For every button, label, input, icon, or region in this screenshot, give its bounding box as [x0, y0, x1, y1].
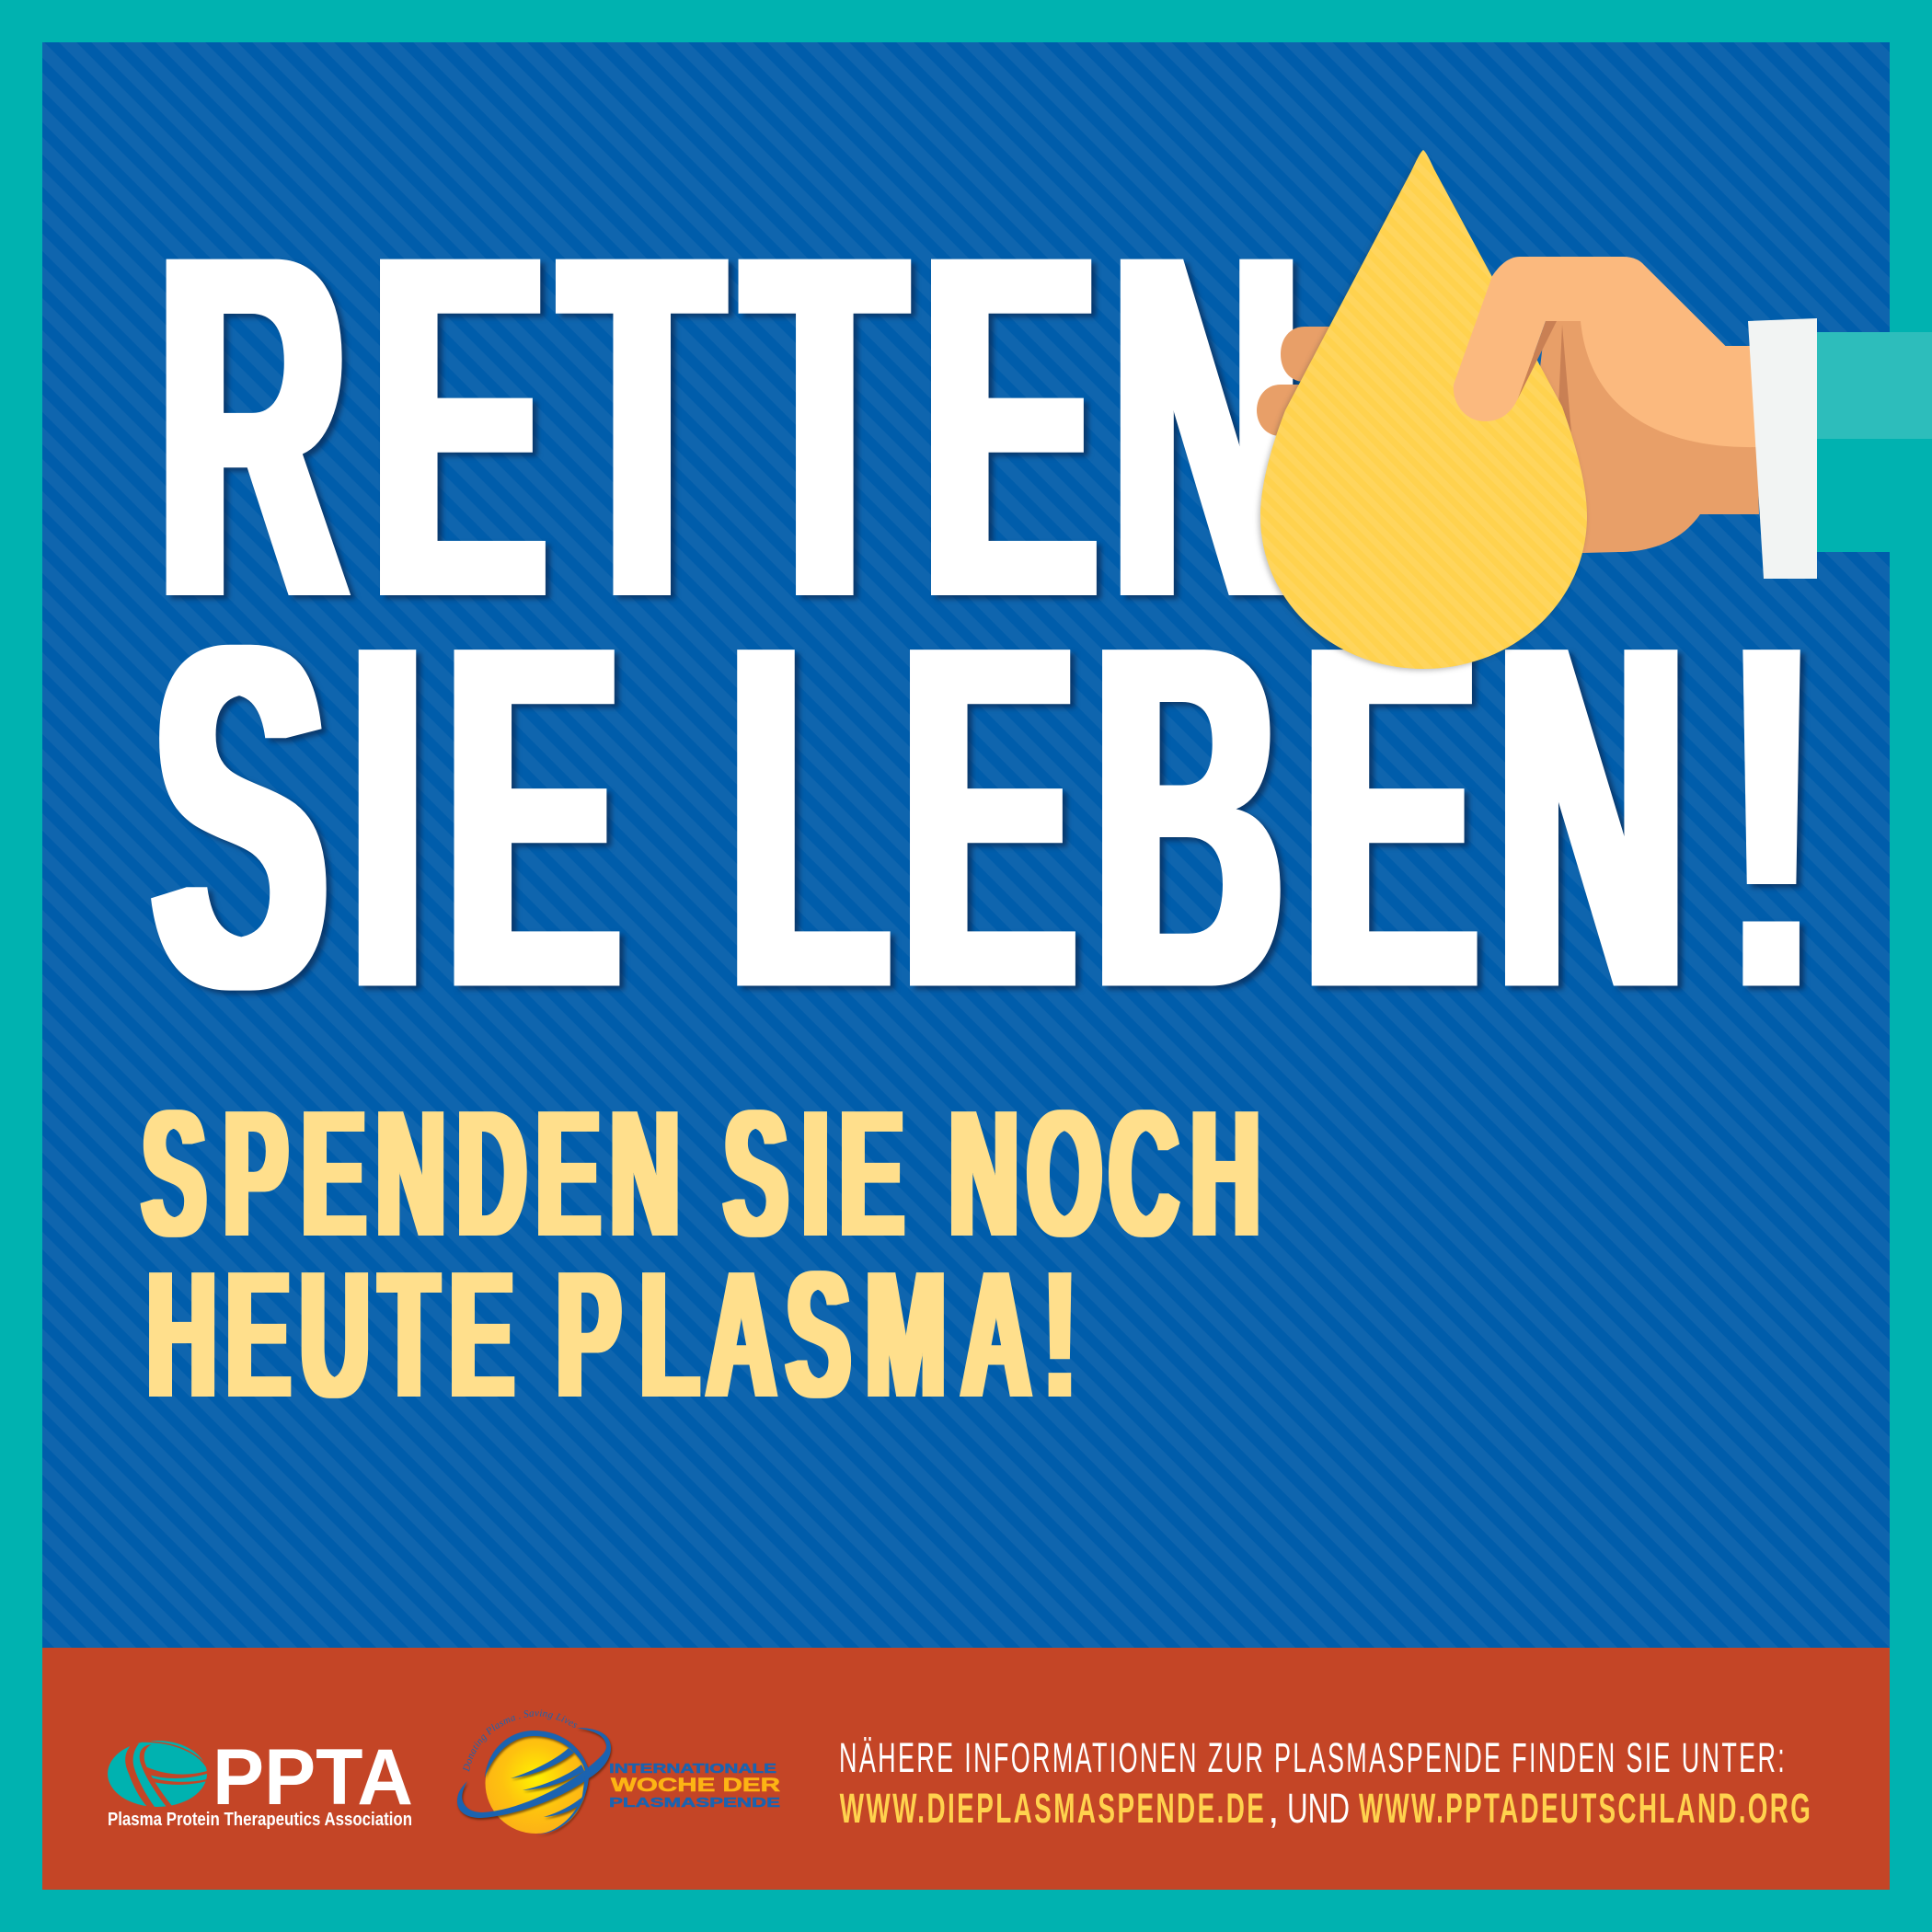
fingers behind the drop — [1257, 327, 1343, 436]
hand palm shadow side — [1518, 321, 1759, 553]
hand upper side and thumb — [1454, 257, 1757, 447]
PPTA globe mark — [108, 1741, 207, 1807]
crease shade — [1558, 325, 1571, 432]
sleeve — [1817, 332, 1932, 552]
logo: PPTA — [108, 1733, 413, 1830]
logo wordmark: INTERNATIONALE — [609, 1762, 776, 1777]
text block: footer information: WWW.PPTADEUTSCHLAND.ORG — [1359, 1785, 1811, 1832]
PPTA wordmark: PPTA — [213, 1733, 413, 1822]
association name: Plasma Protein Therapeutics Association — [108, 1810, 412, 1830]
panel: footer bar — [42, 1648, 1890, 1890]
panel: striped blue background — [42, 42, 1890, 1648]
text block: footer information — [839, 1734, 1811, 1832]
logo: Internationale Woche der Plasmaspende — [456, 1709, 781, 1836]
heading: RETTEN SIE LEBEN! — [154, 154, 1815, 1090]
subheading: SPENDEN SIE NOCH HEUTE PLASMA! — [142, 1074, 1260, 1435]
logo wordmark — [609, 1762, 781, 1811]
curved tagline: Donating Plasma . Saving Lives — [463, 1709, 578, 1772]
subheading: SPENDEN SIE NOCH HEUTE PLASMA!: SPENDEN SIE NOCH — [142, 1074, 1260, 1274]
text block: footer information: , — [1268, 1785, 1280, 1832]
heading: RETTEN SIE LEBEN!: RETTEN — [159, 154, 1300, 700]
subheading: SPENDEN SIE NOCH HEUTE PLASMA!: HEUTE PLASMA! — [147, 1235, 1075, 1435]
plasma drop — [1260, 150, 1587, 669]
logo wordmark: WOCHE DER — [611, 1774, 781, 1796]
shirt cuff — [1748, 318, 1817, 579]
globe — [486, 1732, 587, 1834]
text block: footer information: UND — [1287, 1785, 1350, 1832]
orbit swooshes — [457, 1728, 611, 1834]
text block: footer information: NÄHERE INFORMATIONEN ZUR PLASMASPENDE FINDEN SIE UNTER: — [839, 1734, 1785, 1781]
text block: footer information: WWW.DIEPLASMASPENDE.DE — [840, 1785, 1264, 1832]
heading: RETTEN SIE LEBEN!: SIE LEBEN! — [154, 545, 1815, 1090]
illustration: hand holding plasma drop — [1257, 150, 1932, 669]
thumb crease shade — [1518, 321, 1557, 399]
logo wordmark: PLASMASPENDE — [609, 1796, 780, 1811]
